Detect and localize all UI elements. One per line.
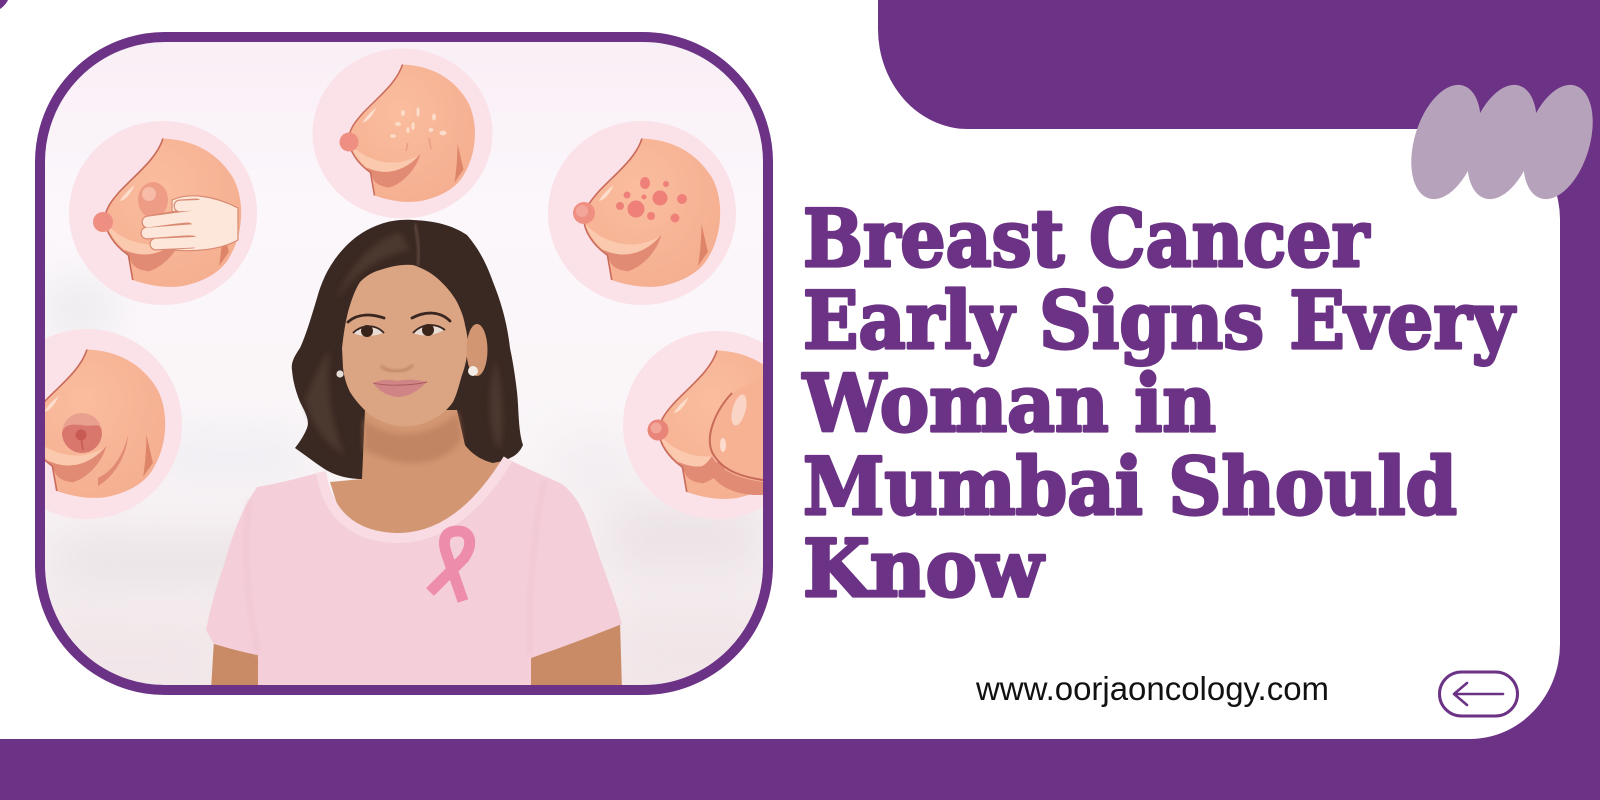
photo frame border [40, 37, 768, 690]
decorative lilac blobs [1399, 76, 1600, 208]
nipple [573, 202, 595, 224]
t-shirt [206, 459, 622, 690]
website url: www.oorjaoncology.com [975, 670, 1329, 707]
photo background [45, 42, 763, 685]
title: Woman in [802, 357, 1216, 450]
hair back [292, 220, 523, 479]
hair shine [305, 232, 503, 455]
circle: red rash [548, 121, 736, 305]
title: Early Signs Every [803, 274, 1516, 367]
ribbon [430, 531, 470, 601]
rash spots [616, 177, 687, 222]
dimples [390, 107, 446, 151]
earrings [468, 366, 478, 376]
lips [373, 380, 427, 397]
circle: lump felt by hand [69, 121, 257, 305]
shirt folds [246, 500, 258, 657]
ear [466, 324, 488, 376]
title: Mumbai Should [803, 440, 1457, 533]
highlights [732, 394, 746, 426]
top-left corner mark [0, 0, 8, 9]
arrow button [1440, 672, 1518, 716]
top purple banner [878, 0, 1600, 129]
circle: swelling [623, 331, 763, 519]
hair parting [415, 224, 419, 266]
nipple [648, 420, 668, 440]
nose shadow [381, 365, 413, 371]
inverted nipple [62, 413, 102, 432]
title [802, 192, 1516, 615]
lump [138, 182, 168, 218]
title: Know [803, 522, 1045, 615]
nipple [340, 132, 358, 152]
face [342, 265, 468, 426]
hand [147, 196, 238, 251]
eyebrows [348, 315, 384, 322]
circle: inverted nipple [45, 329, 182, 519]
arms [211, 644, 258, 685]
eyes [353, 327, 383, 336]
woman [206, 220, 622, 690]
neck and chest [330, 410, 500, 533]
neckline band [321, 459, 508, 538]
nipple [93, 212, 113, 232]
circle: skin dimpling [312, 48, 492, 218]
photo panel [0, 37, 811, 690]
title: Breast Cancer [803, 192, 1370, 285]
